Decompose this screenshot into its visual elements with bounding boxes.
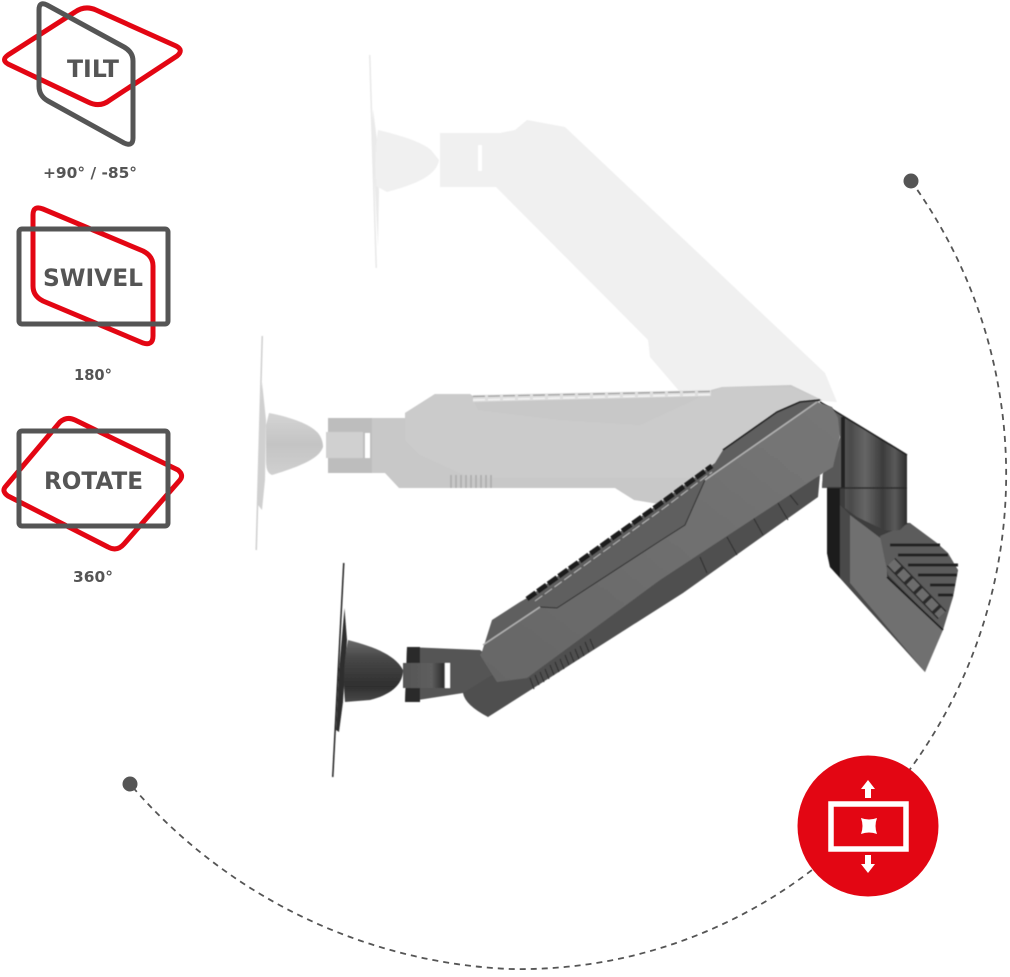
- ridge top edge: [723, 400, 820, 450]
- dark post stripe: [827, 488, 840, 578]
- rotate icon: [4, 418, 182, 586]
- up arrow: [861, 780, 875, 798]
- down arrow: [861, 855, 875, 873]
- collar top edge: [820, 402, 907, 455]
- swivel range: 180°: [74, 366, 112, 384]
- middle arm, faded: [256, 336, 822, 550]
- center star: [861, 818, 877, 834]
- base light panel: [850, 515, 943, 672]
- wall post and base: [820, 402, 958, 672]
- post left panel: [822, 445, 840, 488]
- raised arm, faded: [369, 55, 837, 402]
- plate hub: [336, 608, 347, 732]
- swivel gray frame: [19, 229, 168, 324]
- ridge light line: [535, 472, 712, 601]
- post base body: [827, 486, 958, 672]
- toothed ridge: [527, 466, 712, 599]
- post upper collar: [820, 402, 907, 531]
- collar seam: [827, 487, 907, 489]
- inset panel edge: [540, 480, 705, 608]
- rotate label: ROTATE: [44, 467, 143, 495]
- clevis dark edge: [405, 647, 420, 702]
- dashed motion arc: [130, 181, 1006, 969]
- clevis bracket: [405, 647, 520, 717]
- base ribs: [880, 523, 958, 630]
- swivel label: SWIVEL: [43, 264, 143, 292]
- tilt gray frame: [39, 4, 133, 144]
- main face: [480, 402, 840, 682]
- tilt label: TILT: [67, 55, 120, 83]
- tilt red frame: [4, 8, 180, 105]
- height adjust badge: [798, 756, 938, 896]
- tilt range: +90° / -85°: [43, 164, 137, 182]
- tilt icon: [4, 4, 180, 182]
- knuckle: [403, 663, 444, 688]
- post vertical groove: [841, 417, 845, 488]
- upper chamfer: [481, 400, 820, 655]
- swivel red frame: [33, 208, 153, 344]
- swivel icon: [19, 208, 168, 384]
- rotate range: 360°: [73, 568, 113, 586]
- strip ribs: [530, 495, 798, 689]
- screen frame: [831, 804, 906, 849]
- arc end dot: [122, 776, 138, 792]
- face highlight: [483, 402, 817, 645]
- knuckle slot: [445, 663, 450, 688]
- rotate red frame: [4, 418, 182, 549]
- arc start dot: [904, 174, 918, 188]
- red circle: [798, 756, 938, 896]
- rotate gray frame: [19, 431, 168, 526]
- lower strip: [463, 475, 820, 717]
- ball joint: [344, 640, 403, 702]
- main arm, dark: [332, 400, 840, 777]
- mounting plate: [332, 563, 344, 777]
- base panel trim: [840, 505, 925, 672]
